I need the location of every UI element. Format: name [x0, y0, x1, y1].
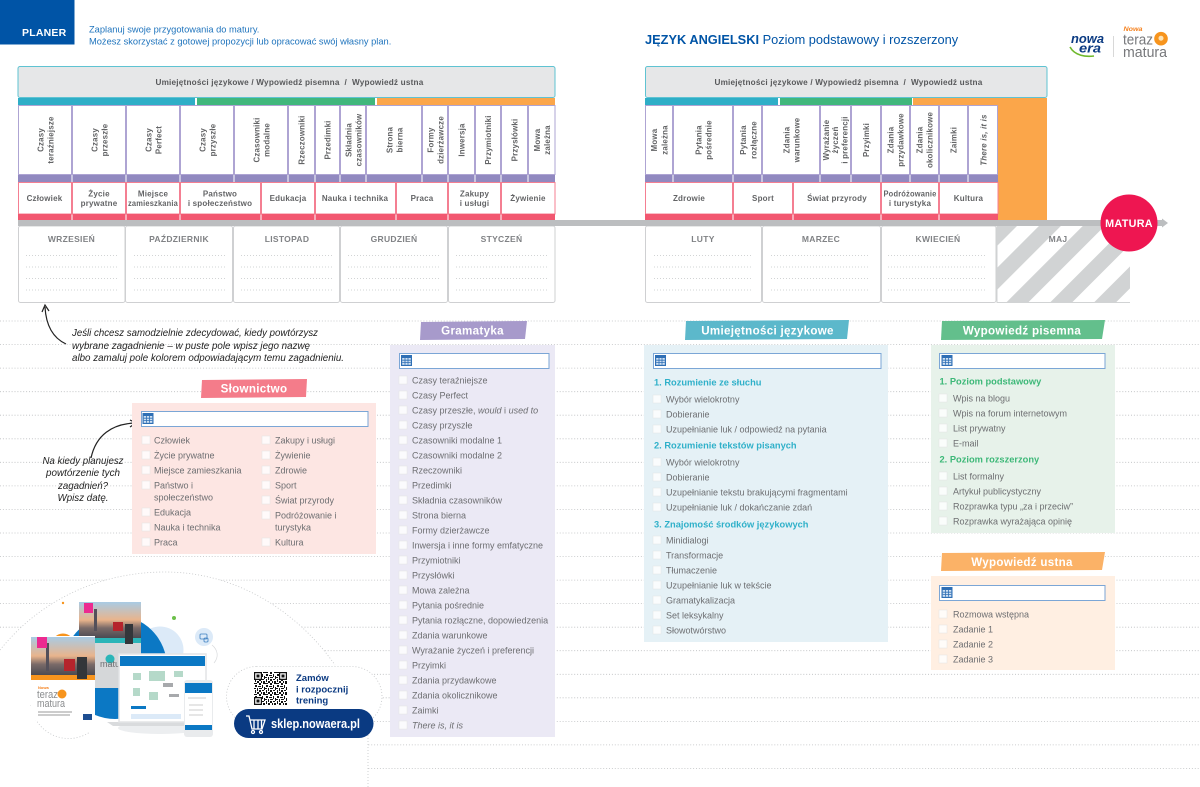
month boxes: MAJ — [1049, 234, 1067, 244]
date input — [654, 354, 881, 368]
skills colour bar — [645, 98, 1047, 220]
checklist right: Kultura — [275, 537, 304, 547]
grammar cells: There is, it is — [980, 114, 988, 166]
checklist: Czasowniki modalne 1 — [412, 435, 502, 445]
grammar cells: Strona — [386, 127, 394, 153]
grammar cells: pośrednie — [704, 120, 714, 160]
checklist left: Praca — [154, 537, 178, 547]
checklist left: Życie prywatne — [154, 450, 215, 460]
month boxes: GRUDZIEŃ — [371, 234, 417, 244]
book: back cover: matura — [100, 659, 128, 669]
header: intro text: Zaplanuj swoje przygotowania do matury. — [89, 24, 259, 34]
vocabulary cells: Człowiek — [27, 194, 63, 203]
order text — [296, 673, 348, 706]
grammar cells: Przymiotniki — [484, 115, 493, 165]
month boxes: WRZESIEŃ — [48, 234, 95, 244]
checklist right: turystyka — [275, 522, 311, 532]
checklist left: Edukacja — [154, 507, 191, 517]
grammar cells: życzeń — [831, 126, 840, 154]
vocabulary cells: i społeczeństwo — [188, 199, 252, 208]
checklist — [399, 375, 548, 730]
section 2: Uzupełnianie luk / dokańczanie zdań — [666, 502, 812, 512]
level 1 — [939, 376, 1067, 448]
level 2: Artykuł publicystyczny — [953, 486, 1042, 496]
section 3: Gramatykalizacja — [666, 595, 735, 605]
logo: Nowa teraz matura — [1123, 26, 1168, 61]
checklist: Strona bierna — [412, 510, 466, 520]
grammar cells: Czasy — [198, 128, 208, 152]
order text: i rozpocznij — [296, 684, 348, 696]
skills colour bar — [18, 98, 555, 105]
grammar cells: Zaimki — [950, 127, 958, 153]
skills header band — [18, 66, 555, 98]
checklist left: Miejsce zamieszkania — [154, 465, 242, 475]
icon: chat bubble — [195, 628, 213, 646]
section 3: Transformacje — [666, 550, 723, 560]
level 2: Rozprawka wyrażająca opinię — [953, 516, 1072, 526]
vocabulary cells: Żywienie — [510, 194, 546, 203]
checklist: Czasy teraźniejsze — [412, 375, 488, 385]
checklist: Czasy przyszłe — [412, 420, 473, 430]
month boxes: STYCZEŃ — [481, 234, 522, 244]
banner: Słownictwo: Słownictwo — [221, 382, 287, 396]
vocabulary cells: Państwo — [203, 190, 237, 198]
checklist left: Nauka i technika — [154, 522, 221, 532]
section 1: Wybór wielokrotny — [666, 394, 740, 404]
matura badge: MATURA — [1105, 218, 1153, 230]
grammar cells: teraźniejsze — [46, 116, 56, 164]
order text: trening — [296, 696, 328, 706]
month boxes — [646, 226, 1130, 302]
level 1: 1. Poziom podstawowy — [940, 376, 1042, 386]
grammar cells: Składnia — [344, 123, 354, 157]
section 3: 3. Znajomość środków językowych — [654, 520, 809, 530]
level 2: List formalny — [953, 471, 1005, 481]
grammar cells: Czasy — [90, 128, 100, 152]
checklist right: Świat przyrody — [275, 494, 335, 505]
checklist: Mowa zależna — [412, 585, 470, 595]
note: choose yourself: wybrane zagadnienie – w puste pole wpisz jego nazwę — [72, 340, 310, 352]
panel: Umiejętności językowe — [644, 320, 888, 642]
arrow: to date field — [91, 420, 136, 458]
header: PLANER tab: PLANER — [22, 27, 67, 39]
vocabulary cells — [18, 182, 555, 220]
vocabulary cells: Miejsce — [138, 190, 169, 198]
section 3: Minidialogi — [666, 535, 709, 545]
book: front cover — [31, 636, 95, 720]
checklist: There is, it is — [412, 720, 464, 730]
level 1: Wpis na blogu — [953, 393, 1010, 403]
level 1: E-mail — [953, 438, 979, 448]
date input — [400, 354, 549, 368]
grammar cells: Zdania — [886, 126, 896, 153]
timeline arrow — [18, 218, 1168, 228]
month boxes — [18, 226, 555, 302]
vocabulary cells: Podróżowanie — [884, 190, 937, 198]
header: subject title: JĘZYK ANGIELSKI Poziom podstawowy i rozszerzony — [645, 32, 959, 47]
promo area: white dotted cloud — [0, 572, 368, 787]
checklist: Czasy Perfect — [412, 390, 469, 400]
section 3: Uzupełnianie luk w tekście — [666, 580, 772, 590]
vocabulary cells: prywatne — [81, 199, 118, 208]
vocabulary cells: Praca — [411, 194, 434, 203]
checklist: Przedimki — [412, 480, 452, 490]
checklist right: Zdrowie — [275, 465, 307, 475]
grammar cells: Czasy — [36, 128, 46, 152]
checklist: Zadanie 1 — [953, 624, 993, 634]
grammar cells: Przedimki — [324, 120, 332, 160]
checklist: Czasy przeszłe, would i used to — [412, 405, 538, 415]
background: dotted note lines — [0, 321, 1200, 768]
banner: Wypowiedź pisemna: Wypowiedź pisemna — [963, 324, 1081, 338]
grammar cells: Pytania — [694, 125, 704, 155]
checklist: Rozmowa wstępna — [953, 609, 1029, 619]
grammar cells: rozłączne — [750, 121, 758, 159]
month boxes: KWIECIEŃ — [916, 234, 960, 244]
grammar cells — [645, 106, 998, 182]
skills header band — [646, 66, 1047, 98]
note: choose yourself: albo zamaluj pole kolorem odpowiadającym temu zagadnieniu. — [72, 352, 344, 364]
checklist: Zdania przydawkowe — [412, 675, 497, 685]
book: front cover: matura — [37, 698, 66, 710]
logo: Nowa teraz matura: teraz — [1123, 32, 1153, 48]
skills header band: Umiejętności językowe / Wypowiedź pisemna / Wypowiedź ustna — [155, 78, 424, 87]
checklist: Składnia czasowników — [412, 495, 503, 505]
banner: Gramatyka: Gramatyka — [441, 324, 504, 338]
header: intro text: Możesz skorzystać z gotowej propozycji lub opracować swój własny plan. — [89, 36, 391, 46]
vocabulary cells: zamieszkania — [128, 199, 178, 208]
vocabulary cells: Sport — [752, 194, 774, 203]
banner: Umiejętności językowe: Umiejętności językowe — [701, 324, 834, 338]
book: back cover — [79, 602, 141, 688]
checklist: Zadanie 3 — [953, 654, 993, 664]
grammar cells: Inwersja — [458, 123, 466, 157]
level 2: Rozprawka typu „za i przeciw” — [953, 501, 1073, 511]
promo: product illustration — [31, 602, 217, 739]
checklist: Zadanie 2 — [953, 639, 993, 649]
checklist right: Sport — [275, 480, 297, 490]
vocabulary cells: i usługi — [460, 199, 489, 208]
grammar cells: Perfect — [154, 126, 164, 154]
date input — [940, 586, 1105, 600]
grammar cells: czasowników — [354, 113, 364, 166]
checklist: Przyimki — [412, 660, 446, 670]
shop button: sklep.nowaera.pl — [271, 717, 360, 731]
checklist right — [262, 435, 337, 547]
planner: first semester — [18, 66, 555, 302]
checklist: Pytania pośrednie — [412, 600, 484, 610]
panel: Wypowiedź pisemna — [931, 320, 1115, 533]
checklist — [939, 609, 1029, 664]
logo: Nowa Era: era — [1079, 42, 1101, 56]
checklist: Przymiotniki — [412, 555, 461, 565]
vocabulary cells: Kultura — [954, 194, 984, 203]
book: front cover: teraz — [37, 689, 58, 701]
section 1: Uzupełnianie luk / odpowiedź na pytania — [666, 424, 827, 434]
checklist: Pytania rozłączne, dopowiedzenia — [412, 615, 548, 625]
order text: Zamów — [296, 673, 329, 684]
matura badge — [1100, 194, 1158, 252]
laptop — [107, 654, 206, 726]
phone — [184, 680, 213, 737]
header: intro text — [89, 24, 391, 46]
section 3: Tłumaczenie — [666, 565, 717, 575]
banner: Wypowiedź ustna — [941, 552, 1105, 571]
checklist left: społeczeństwo — [154, 492, 213, 502]
panel: Słownictwo — [132, 379, 376, 554]
level 1: List prywatny — [953, 423, 1006, 433]
note: enter date — [42, 455, 124, 504]
arrow: to empty month field — [42, 305, 66, 344]
promo: order call to action — [226, 666, 382, 738]
header: PLANER tab — [0, 0, 74, 44]
vocabulary cells: Świat przyrody — [807, 194, 867, 203]
grammar cells: warunkowe — [792, 117, 802, 163]
grammar cells: Pytania — [739, 125, 748, 155]
level 1: Wpis na forum internetowym — [953, 408, 1067, 418]
note: choose yourself — [71, 327, 344, 364]
banner: Umiejętności językowe — [685, 320, 849, 340]
grammar cells: Wyrażanie — [822, 119, 831, 160]
grammar cells: Przyimki — [862, 123, 871, 157]
section 2: Dobieranie — [666, 472, 710, 482]
section 1: 1. Rozumienie ze słuchu — [654, 378, 762, 388]
note: enter date: zagadnień? — [57, 480, 108, 492]
section 3 — [653, 520, 809, 635]
grammar cells: Rzeczowniki — [298, 115, 306, 165]
checklist: Rzeczowniki — [412, 465, 462, 475]
checklist right: Zakupy i usługi — [275, 435, 335, 445]
checklist left: Państwo i — [154, 480, 193, 490]
grammar cells: zależna — [543, 125, 552, 155]
checklist: Formy dzierżawcze — [412, 525, 490, 535]
month boxes: PAŹDZIERNIK — [149, 234, 209, 244]
checklist: Przysłówki — [412, 570, 455, 580]
note: enter date: Wpisz datę. — [58, 492, 108, 504]
shop button — [234, 709, 374, 738]
checklist: Zaimki — [412, 705, 438, 715]
planner: second semester — [645, 66, 1130, 302]
checklist: Zdania warunkowe — [412, 630, 488, 640]
banner: Słownictwo — [201, 379, 307, 398]
section 1: Dobieranie — [666, 409, 710, 419]
logo: Nowa Era: nowa — [1071, 32, 1104, 46]
section 2: Uzupełnianie tekstu brakującymi fragmentami — [666, 487, 848, 497]
checklist left: Człowiek — [154, 435, 191, 445]
section 1 — [653, 378, 827, 434]
note: enter date: powtórzenie tych — [45, 467, 120, 479]
date input — [142, 412, 368, 426]
panel: Wypowiedź ustna — [931, 552, 1115, 670]
vocabulary cells: Edukacja — [270, 194, 307, 203]
grammar cells: Mowa — [650, 128, 659, 151]
banner: Wypowiedź ustna: Wypowiedź ustna — [971, 556, 1073, 569]
checklist right: Żywienie — [275, 450, 311, 460]
book: front cover: Nowa — [38, 685, 49, 690]
panel: Gramatyka — [390, 321, 555, 737]
grammar cells: Czasy — [144, 128, 154, 152]
banner: Wypowiedź pisemna — [941, 320, 1105, 340]
vocabulary cells: i turystyka — [889, 199, 931, 208]
grammar cells: modalne — [262, 123, 272, 157]
grammar cells: przydawkowe — [896, 113, 906, 167]
section 3: Słowotwórstwo — [666, 625, 726, 635]
QR code — [254, 672, 287, 705]
grammar cells: okolicznikowe — [926, 112, 934, 168]
icon: cart — [246, 716, 265, 734]
level 2 — [939, 454, 1073, 526]
grammar cells: Zdania — [782, 126, 792, 153]
grammar cells: i preferencji — [840, 116, 850, 164]
note: enter date: Na kiedy planujesz — [42, 455, 124, 467]
checklist: Czasowniki modalne 2 — [412, 450, 502, 460]
checklist: Zdania okolicznikowe — [412, 690, 498, 700]
vocabulary cells: Zakupy — [460, 190, 489, 198]
date input — [940, 354, 1105, 368]
section 2: Wybór wielokrotny — [666, 457, 740, 467]
checklist: Wyrażanie życzeń i preferencji — [412, 645, 534, 655]
grammar cells: Przysłówki — [510, 119, 520, 161]
level 2: 2. Poziom rozszerzony — [940, 454, 1040, 464]
checklist: Inwersja i inne formy emfatyczne — [412, 540, 543, 550]
section 2 — [653, 440, 848, 512]
month boxes: LISTOPAD — [265, 234, 309, 244]
month boxes: LUTY — [691, 234, 715, 244]
grammar cells: bierna — [396, 127, 404, 152]
grammar cells — [18, 106, 555, 182]
checklist right: Podróżowanie i — [275, 510, 337, 520]
skills header band: Umiejętności językowe / Wypowiedź pisemna / Wypowiedź ustna — [714, 78, 983, 87]
vocabulary cells: Nauka i technika — [322, 194, 389, 203]
grammar cells: Formy — [426, 127, 436, 153]
note: choose yourself: Jeśli chcesz samodzielnie zdecydować, kiedy powtórzysz — [71, 327, 319, 339]
section 2: 2. Rozumienie tekstów pisanych — [654, 440, 797, 450]
logo: Nowa Era — [1070, 32, 1114, 57]
vocabulary cells: Zdrowie — [673, 194, 705, 203]
vocabulary cells: Życie — [88, 190, 110, 198]
banner: Gramatyka — [420, 321, 527, 340]
grammar cells: Mowa — [533, 128, 542, 151]
grammar cells: przeszłe — [100, 123, 110, 156]
checklist left — [142, 435, 242, 547]
logo: Nowa teraz matura: Nowa — [1124, 26, 1143, 33]
month boxes: MARZEC — [802, 234, 840, 244]
section 3: Set leksykalny — [666, 610, 724, 620]
logo: Nowa teraz matura: matura — [1123, 44, 1168, 61]
grammar cells: dzierżawcze — [436, 116, 446, 164]
grammar cells: przyszłe — [208, 123, 218, 156]
grammar cells: Czasowniki — [252, 118, 262, 162]
vocabulary cells — [645, 182, 998, 220]
grammar cells: Zdania — [916, 126, 924, 153]
grammar cells: zależna — [660, 125, 670, 155]
